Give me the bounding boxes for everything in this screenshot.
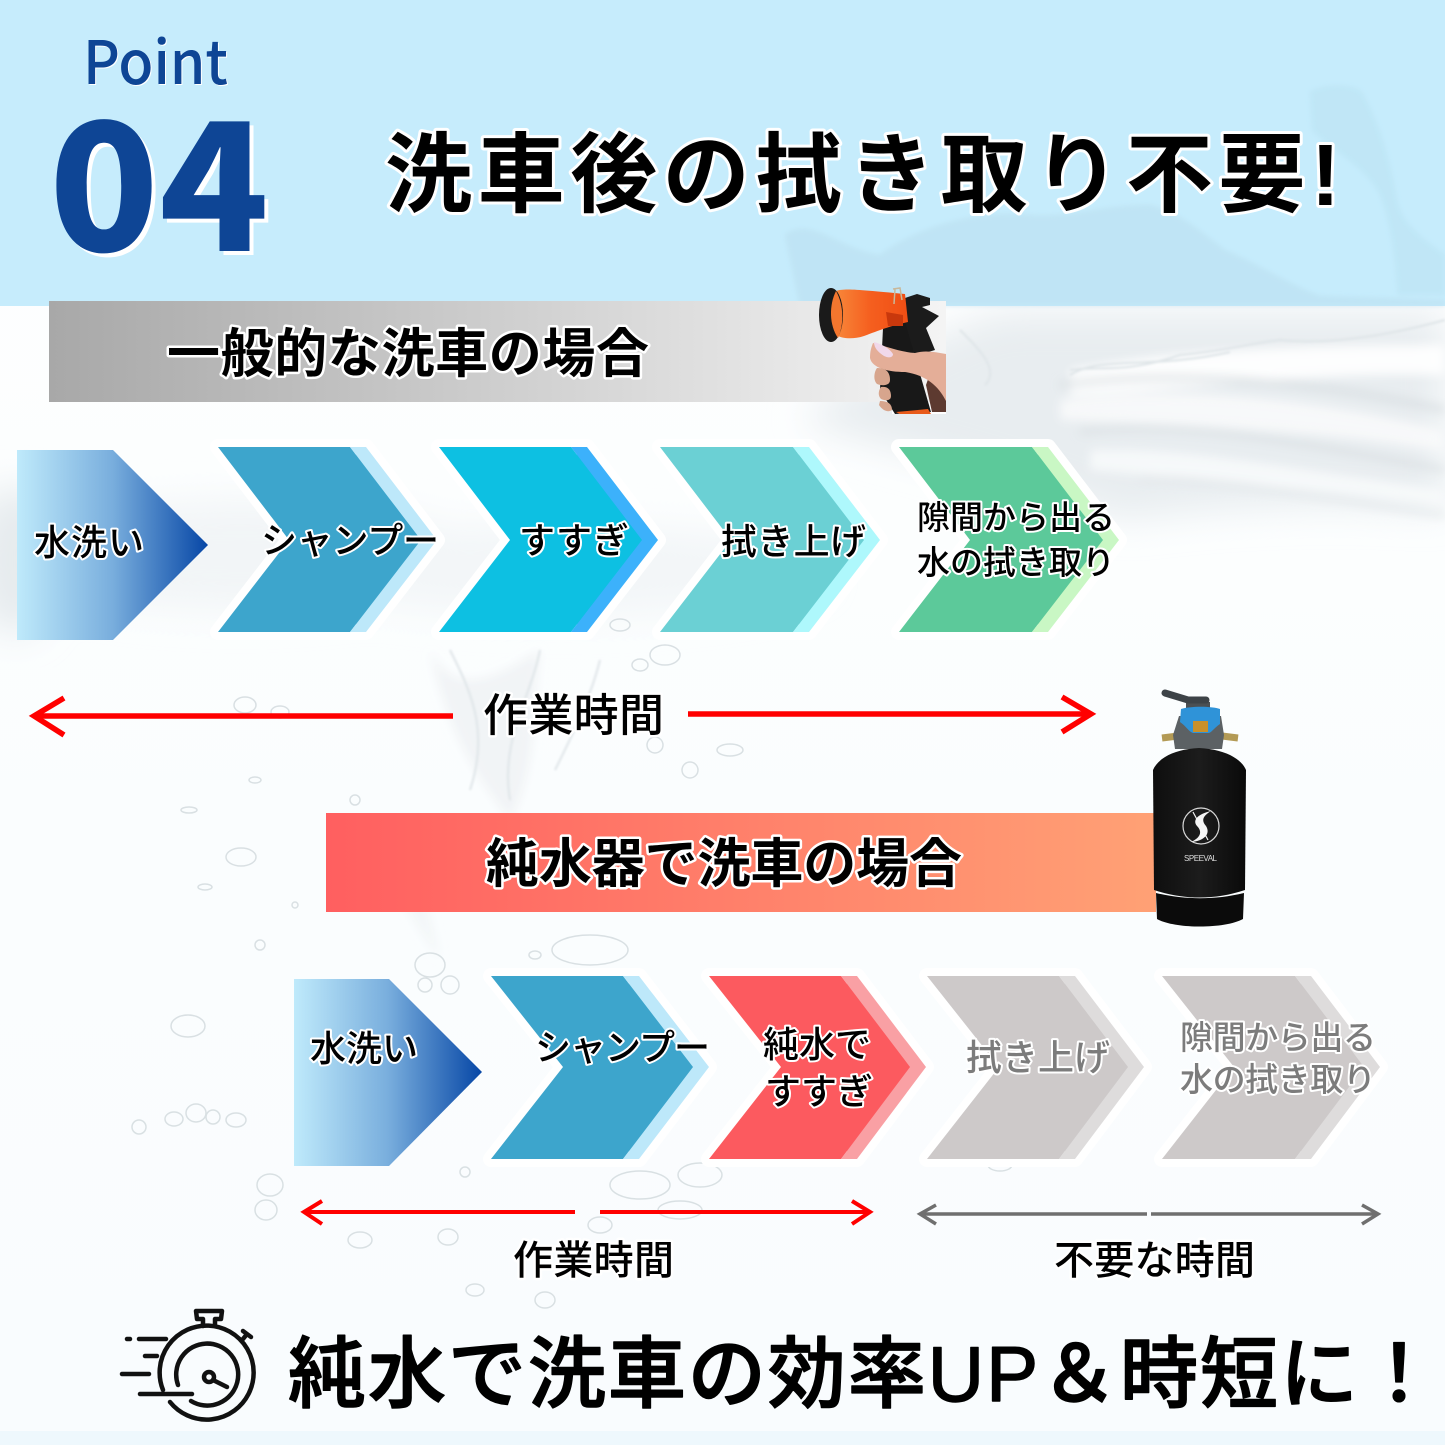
panel: pure water wash heading bbox=[326, 813, 1156, 912]
bottom band bbox=[0, 1431, 1445, 1445]
step: 水洗い: 水洗い bbox=[310, 1028, 418, 1069]
arrow: unnecessary time: 不要な時間 bbox=[1054, 1239, 1255, 1283]
header band bbox=[0, 0, 1445, 306]
icon: pure water filter tank bbox=[1153, 693, 1246, 926]
step: シャンプー: シャンプー bbox=[535, 1027, 710, 1068]
step: 水洗い bbox=[17, 450, 208, 640]
step: 隙間から出る水の拭き取り (unneeded): 水の拭き取り bbox=[1180, 1061, 1376, 1098]
step: 純水ですすぎ: 純水で bbox=[763, 1024, 871, 1065]
step: すすぎ: すすぎ bbox=[519, 520, 629, 561]
point label: Point bbox=[83, 15, 228, 102]
closing message: 純水で洗車の効率UP＆時短に！ bbox=[288, 1330, 1438, 1418]
number 04: 04 bbox=[49, 50, 269, 302]
panel: pure water wash heading: 純水器で洗車の場合 bbox=[486, 835, 962, 894]
step: 拭き上げ: 拭き上げ bbox=[721, 521, 866, 562]
step: 純水ですすぎ bbox=[709, 976, 926, 1159]
step: 純水ですすぎ: すすぎ bbox=[765, 1071, 873, 1112]
step: 水洗い bbox=[294, 979, 482, 1166]
step: 水洗い: 水洗い bbox=[34, 522, 144, 563]
step: 隙間から出る水の拭き取り (unneeded): 隙間から出る bbox=[1180, 1019, 1376, 1056]
step: シャンプー bbox=[218, 447, 439, 632]
step: 隙間から出る水の拭き取り bbox=[899, 447, 1119, 632]
step: 拭き上げ (unneeded): 拭き上げ bbox=[966, 1037, 1110, 1078]
step: シャンプー: シャンプー bbox=[261, 520, 439, 561]
icon: stopwatch bbox=[122, 1311, 254, 1420]
arrow: work time, pure water wash: 作業時間 bbox=[513, 1239, 674, 1283]
title: 洗車後の拭き取り不要! bbox=[385, 127, 1340, 224]
step: 拭き上げ (unneeded) bbox=[927, 976, 1144, 1159]
arrow: work time, regular wash bbox=[34, 690, 1091, 741]
step: すすぎ bbox=[439, 447, 658, 632]
arrow: work time, pure water wash bbox=[304, 1201, 870, 1283]
step: 隙間から出る水の拭き取り: 隙間から出る bbox=[917, 499, 1115, 536]
icon: pure water filter tank: SPEEVAL bbox=[1184, 854, 1218, 863]
water texture bbox=[0, 312, 1445, 1445]
step: 拭き上げ bbox=[660, 447, 880, 632]
step: シャンプー bbox=[491, 976, 710, 1159]
arrow: unnecessary time bbox=[920, 1205, 1378, 1283]
step: 隙間から出る水の拭き取り (unneeded) bbox=[1162, 976, 1380, 1159]
icon: spray nozzle with hand bbox=[819, 288, 946, 414]
chevron flow: regular wash bbox=[17, 447, 1119, 640]
panel: regular car wash heading bbox=[49, 301, 946, 402]
chevron flow: pure water wash bbox=[294, 976, 1380, 1166]
step: 隙間から出る水の拭き取り: 水の拭き取り bbox=[917, 544, 1115, 581]
arrow: work time, regular wash: 作業時間 bbox=[483, 690, 664, 741]
panel: regular car wash heading: 一般的な洗車の場合 bbox=[167, 325, 649, 384]
